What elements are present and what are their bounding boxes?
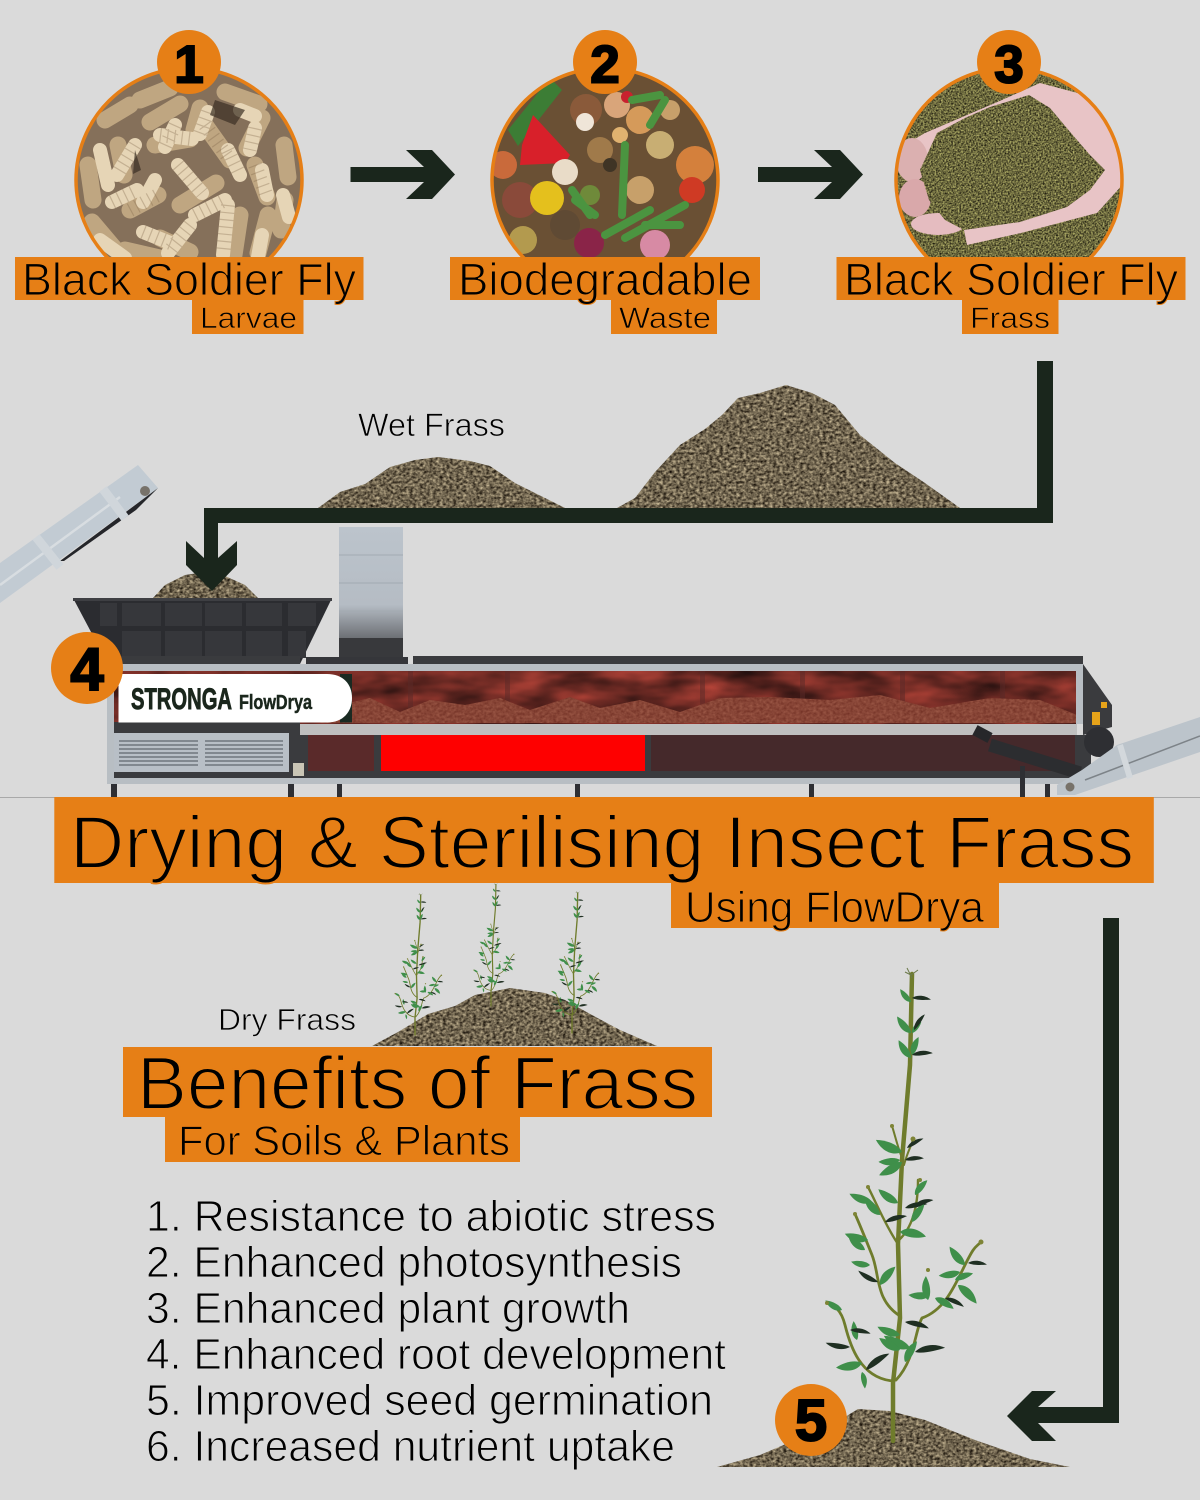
flow arrow: dryer to plant: [1007, 918, 1119, 1441]
number badge 1: 1: [174, 36, 204, 94]
label: black soldier fly: Black Soldier Fly: [22, 254, 356, 305]
number badge 5: [775, 1384, 847, 1456]
number badge 4: 4: [70, 636, 104, 703]
logo plate: STRONGA: [131, 683, 232, 716]
large plant pile: [714, 1405, 1074, 1468]
dryer machine: [73, 598, 1114, 797]
label: black soldier fly: Black Soldier Fly: [844, 254, 1178, 305]
right conveyor: [1057, 717, 1200, 795]
number badge 5: 5: [795, 1388, 827, 1454]
circle outline: [492, 68, 718, 292]
benefits list: 3. Enhanced plant growth: [146, 1284, 630, 1333]
dry frass pile: [368, 985, 660, 1047]
control box: [293, 763, 304, 776]
heading: benefits of frass: Benefits of Frass: [137, 1041, 698, 1125]
number badge 3: [977, 30, 1041, 94]
subtitle: Using FlowDrya: [685, 883, 985, 932]
red heat panel: [381, 735, 645, 771]
frame: [107, 664, 1083, 784]
small plant right: [551, 891, 600, 1033]
feed hopper pile: [153, 574, 258, 598]
label: waste: Waste: [619, 302, 711, 335]
photo: frass in hand: [898, 74, 1120, 257]
ventilation grille: [114, 733, 289, 772]
wet frass small pile: [318, 457, 565, 508]
sub-heading: for soils and plants: For Soils & Plants: [178, 1117, 510, 1164]
photo: food waste: [494, 74, 716, 257]
step 1: black soldier fly larvae: [15, 30, 364, 335]
wet frass large pile: [612, 382, 964, 510]
top cover: [413, 656, 1083, 664]
benefits list: 2. Enhanced photosynthesis: [146, 1238, 682, 1287]
hopper: [73, 598, 332, 664]
number badge 4: [51, 632, 123, 704]
small plant left: [394, 893, 443, 1035]
benefits list: 5. Improved seed germination: [146, 1376, 713, 1425]
chimney: [306, 527, 408, 664]
circle outline: [76, 68, 302, 292]
number badge 2: [573, 30, 637, 94]
logo plate: [118, 674, 352, 722]
benefits list: 6. Increased nutrient uptake: [146, 1422, 675, 1471]
label: larvae: Larvae: [200, 302, 297, 335]
arrow: step 1 to step 2: [350, 150, 455, 199]
benefits list: 1. Resistance to abiotic stress: [146, 1192, 716, 1241]
small plant centre: [473, 883, 515, 1006]
outfeed auger: [975, 730, 1080, 773]
number badge 3: 3: [994, 36, 1024, 94]
left conveyor: [0, 465, 158, 603]
flow arrow: frass to hopper: [186, 361, 1053, 591]
main title: Drying & Sterilising Insect Frass: [70, 801, 1134, 884]
end housing: [1083, 664, 1114, 778]
number badge 2: 2: [590, 36, 620, 94]
large plant: [823, 968, 987, 1441]
wet frass label: Wet Frass: [358, 407, 505, 443]
label: biodegradable: Biodegradable: [458, 254, 752, 305]
legs: [111, 766, 1050, 797]
arrow: step 2 to step 3: [758, 150, 863, 199]
number badge 1: [157, 30, 221, 94]
circle outline: [896, 68, 1122, 292]
logo plate: FlowDrya: [239, 692, 313, 714]
step 3: black soldier fly frass: [836, 30, 1186, 335]
photo: larvae: [78, 74, 300, 257]
step 2: biodegradable waste: [450, 30, 760, 335]
lower section: [114, 722, 1083, 778]
label: frass: Frass: [970, 302, 1050, 335]
upper drying chamber: [114, 671, 1077, 724]
benefits list: [146, 1192, 726, 1471]
ground line: [0, 796, 1200, 798]
dry frass label: Dry Frass: [218, 1002, 356, 1037]
benefits list: 4. Enhanced root development: [146, 1330, 726, 1379]
